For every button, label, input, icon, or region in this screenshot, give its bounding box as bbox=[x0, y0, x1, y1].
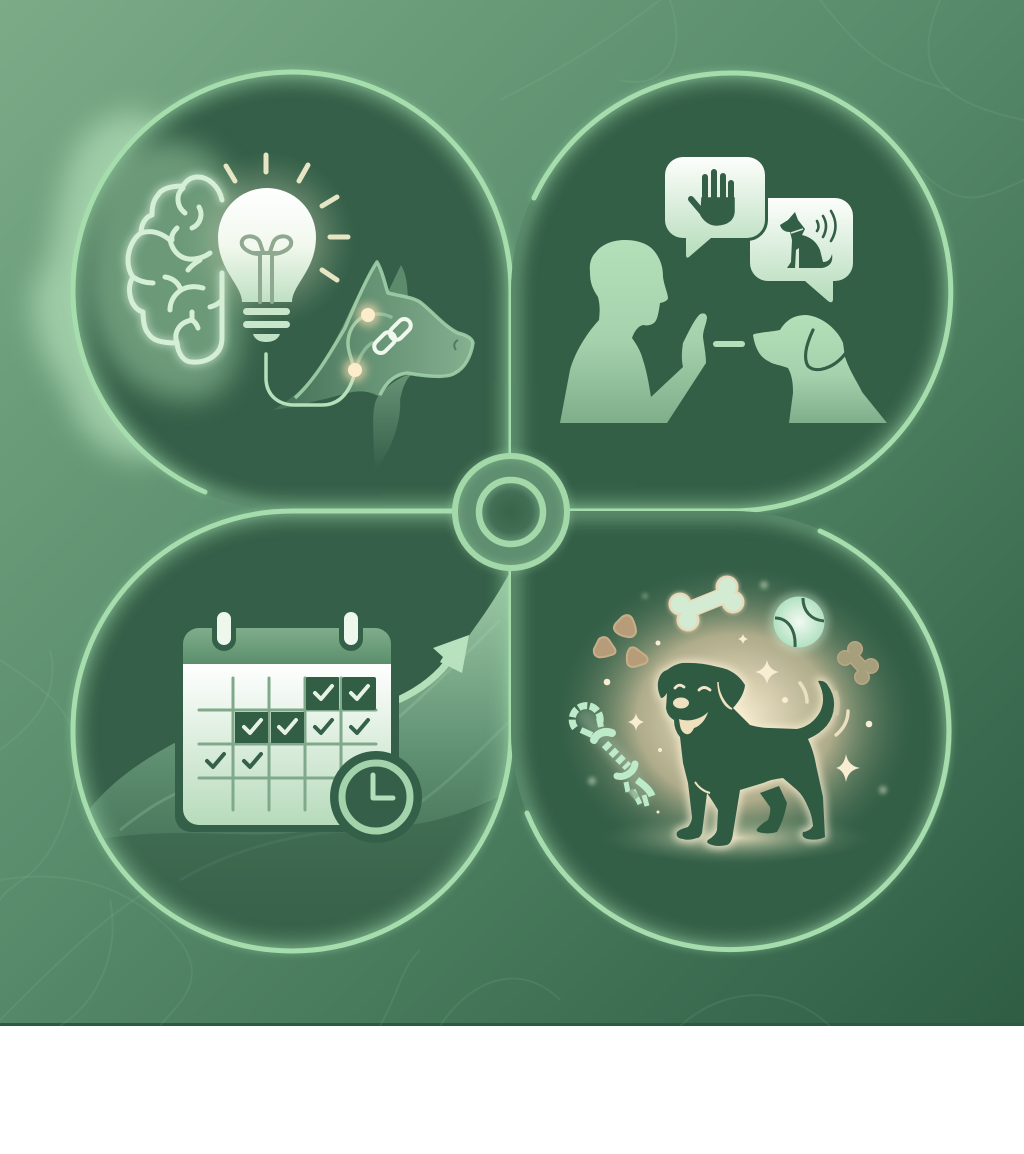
panel: consistency schedule bbox=[60, 505, 520, 965]
icon: tennis ball bbox=[769, 592, 829, 652]
calendar grid bbox=[199, 678, 376, 810]
panel outline bbox=[534, 73, 951, 511]
icon: tail wag lines bbox=[800, 683, 848, 735]
icon: brain bbox=[128, 177, 222, 362]
icon: tan bone bbox=[837, 641, 879, 685]
dog face details bbox=[673, 682, 732, 793]
panel: brain and bulb insight bbox=[60, 60, 520, 520]
calendar binder rings bbox=[212, 606, 363, 651]
icon: dog speech bubble bbox=[750, 198, 853, 302]
icon: calendar bbox=[175, 606, 422, 843]
icon: soft bokeh dots bbox=[588, 581, 887, 794]
icon: person silhouette bbox=[560, 240, 707, 423]
icon: bulb rays bbox=[226, 155, 348, 280]
icon: clock bbox=[330, 751, 422, 843]
icon: bone bbox=[668, 575, 745, 632]
icon: rope toy bbox=[572, 706, 652, 806]
panel background: top left bbox=[76, 74, 506, 508]
growth hill bbox=[90, 575, 508, 878]
icon: chain link bbox=[372, 316, 413, 356]
icon: dog silhouette bbox=[753, 315, 887, 423]
panel background: bottom left bbox=[76, 514, 508, 948]
icon: sparkles bbox=[604, 634, 872, 814]
icon: connection cord bbox=[266, 314, 391, 405]
icon: dash between person and dog bbox=[713, 341, 745, 347]
icon: dog head silhouette bbox=[273, 262, 473, 470]
left glow cloud behind first panel bbox=[33, 113, 175, 459]
panel outline bbox=[527, 531, 949, 950]
icon: progress arrow bbox=[398, 635, 469, 700]
panel outline bbox=[73, 72, 511, 492]
icon: kibble treats bbox=[594, 615, 648, 667]
panel background: bottom right bbox=[505, 505, 965, 965]
central hub ring bbox=[455, 456, 567, 568]
icon: happy dog bbox=[658, 663, 834, 846]
calendar check marks bbox=[207, 686, 368, 767]
panel: rewards and happy dog bbox=[505, 505, 965, 965]
icon: hand speech bubble bbox=[665, 157, 765, 258]
icon: glowing nodes bbox=[343, 303, 380, 382]
panel background: top right bbox=[511, 76, 948, 508]
panel outline bbox=[73, 511, 511, 951]
calendar dark cells bbox=[235, 677, 376, 743]
icon: light bulb bbox=[218, 188, 316, 342]
panel: human and dog communication bbox=[505, 60, 965, 520]
